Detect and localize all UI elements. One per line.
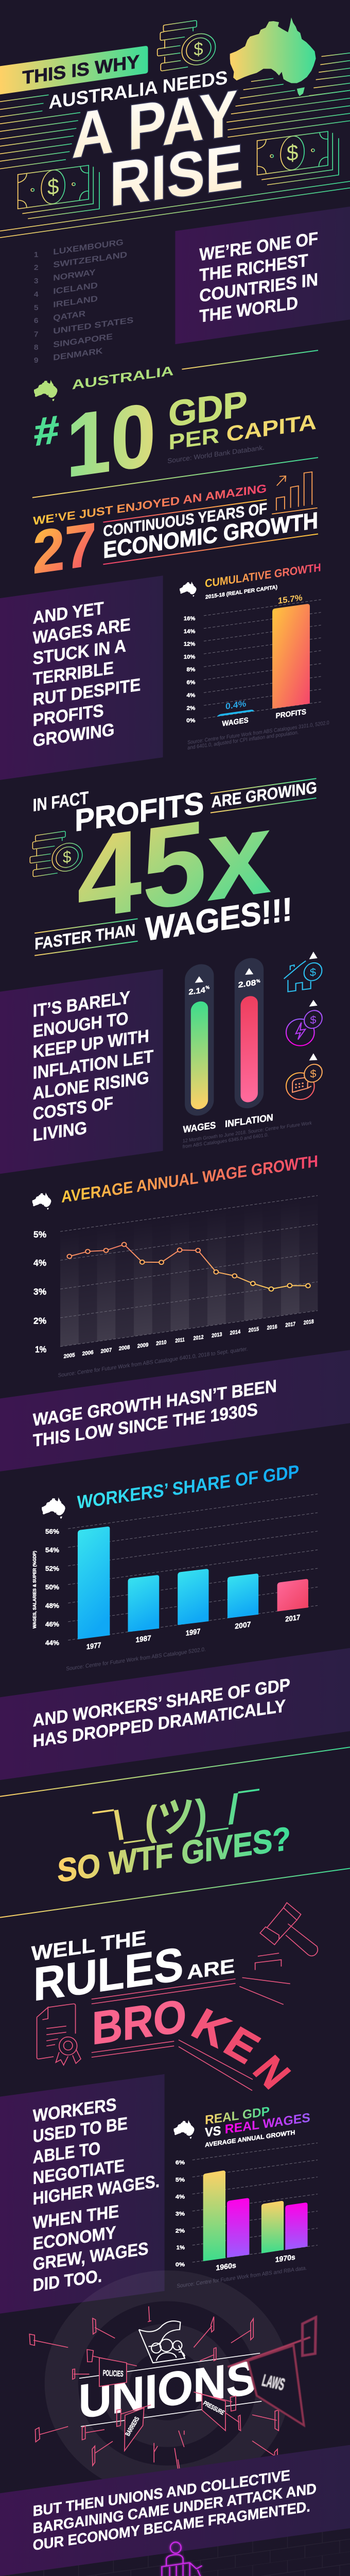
list: top countries by GDP per capita: NORWAY — [53, 267, 96, 283]
icon: hammer — [260, 1903, 318, 1956]
axis labels: percent: 16% — [184, 615, 196, 622]
panel: barely enough — [0, 969, 163, 1174]
panel: workers used to negotiate — [0, 2074, 165, 2314]
panel: workers used to negotiate: ABLE TO — [33, 2138, 100, 2167]
panel: workers used to negotiate: WORKERS — [33, 2094, 116, 2126]
panel: barely enough: LIVING — [33, 1117, 87, 1145]
axis labels: percent: 6% — [187, 680, 196, 686]
chart title: real GDP vs real wages — [205, 2104, 310, 2148]
axis labels: growth percent: 6% — [176, 2160, 185, 2166]
bar: 1977 — [78, 1527, 110, 1639]
sign: laws, flying — [227, 2317, 316, 2426]
panel: and yet wages are stuck — [0, 575, 163, 780]
list: top countries by GDP per capita: SINGAPORE — [53, 332, 113, 349]
bar labels: years: 2017 — [285, 1613, 300, 1624]
section: gig economy — [0, 2528, 350, 2576]
bar labels: wages and profits: WAGES — [222, 716, 249, 728]
icon: banknote left — [18, 165, 99, 219]
gauge: inflation — [235, 956, 264, 1110]
band: but then unions: BUT THEN UNIONS AND COLLECTIVE — [33, 2467, 290, 2520]
axis labels: years: 2014 — [230, 1329, 241, 1336]
band: wage growth hasn't been this low: WAGE GROWTH HASN’T BEEN — [33, 1376, 277, 1430]
panel: workers used to negotiate: NEGOTIATE — [33, 2155, 125, 2188]
icon: rising bar chart — [272, 472, 318, 514]
banner: this is why — [0, 46, 148, 94]
panel: richest countries: COUNTRIES IN — [199, 269, 318, 306]
list: top countries by GDP per capita: 3 — [34, 277, 39, 285]
bar: profits 15.7% — [272, 604, 310, 709]
axis labels: growth percent: 3% — [176, 2211, 185, 2217]
sign: pressure: PRESSURE — [202, 2400, 226, 2416]
axis labels: 5% to 1%: 4% — [33, 1258, 46, 1268]
label: Australia: AUSTRALIA — [72, 363, 173, 392]
rule above growth statement — [103, 500, 267, 522]
axis labels: growth percent: 1% — [177, 2245, 185, 2251]
panel text: and yet wages are stuck: PROFITS — [33, 700, 104, 730]
list: top countries by GDP per capita: 7 — [34, 330, 39, 339]
list: top countries by GDP per capita: 6 — [34, 317, 39, 325]
chart title: real GDP vs real wages: REAL WAGES — [225, 2110, 310, 2137]
source: GDP vs wages: Source: Centre for Future Work from ABS and RBA data. — [177, 2265, 307, 2290]
sign: pressure — [202, 2394, 226, 2431]
stripes: right of title — [226, 53, 350, 137]
heading: rules: RULES — [33, 1938, 183, 2011]
axis labels: years: 2012 — [194, 1334, 204, 1342]
panel text: and yet wages are stuck: WAGES ARE — [33, 614, 131, 648]
panel: barely enough: ALONE RISING — [33, 1067, 149, 1104]
heading: broken: E — [216, 2018, 268, 2073]
source: wage growth: Source: Centre for Future Work from ABS Catalogue 6401.0, 2018 to Sept. quarter. — [58, 1346, 248, 1379]
axis labels: percent of GDP: 46% — [45, 1620, 59, 1628]
heading: continuous years of: CONTINUOUS YEARS OF — [103, 499, 267, 540]
band: but then unions: BARGAINING CAME UNDER ATTACK AND — [33, 2481, 317, 2537]
bar: 2017 — [277, 1579, 308, 1612]
panel: richest countries: THE WORLD — [199, 292, 298, 326]
axis labels: percent of GDP: 44% — [45, 1639, 59, 1647]
banner: this is why: THIS IS WHY — [22, 51, 139, 88]
chart: share gridlines — [68, 1494, 318, 1640]
heading: are growing: ARE GROWING — [212, 778, 317, 811]
pink broken rules — [92, 1953, 290, 2091]
panel: workers used to negotiate: WHEN THE — [33, 2201, 119, 2233]
list: top countries by GDP per capita: 2 — [34, 264, 39, 272]
icon: electricity cost — [286, 1000, 322, 1046]
icon: house cost: $ — [310, 965, 316, 979]
axis labels: growth percent: 5% — [176, 2177, 185, 2183]
list: top countries by GDP per capita: LUXEMBOURG — [53, 238, 124, 257]
bar labels: years: 2007 — [235, 1620, 251, 1631]
heading: so wtf gives: SO WTF GIVES? — [57, 1820, 291, 1889]
axis labels: percent: 8% — [187, 666, 196, 673]
icon: banknote right: $ — [287, 140, 298, 166]
rules around unions — [79, 2353, 261, 2427]
list: top countries by GDP per capita: QATAR — [53, 309, 85, 323]
list: top countries by GDP per capita: SWITZERLAND — [53, 250, 127, 269]
axis labels: years: 2006 — [82, 1349, 94, 1357]
gauge: wages — [185, 962, 214, 1117]
bar: 1997 — [178, 1569, 208, 1625]
rule below growth statement — [103, 534, 318, 564]
axis labels: 5% to 1%: 2% — [33, 1315, 46, 1326]
divider line — [32, 457, 318, 498]
axis labels: years: 2008 — [119, 1345, 130, 1352]
source: inflation: 12 Month Growth to June 2018. Source: Centre for Future Work — [183, 1121, 312, 1144]
band: wage growth hasn't been this low — [0, 1350, 350, 1471]
axis labels: percent: 2% — [187, 705, 196, 711]
gauge labels: INFLATION — [225, 1113, 273, 1130]
source: inflation — [183, 1121, 312, 1150]
section: unions under attack — [0, 2265, 350, 2576]
axis labels: percent of GDP: 56% — [45, 1528, 59, 1535]
icon: banknote right — [257, 131, 339, 185]
list: top countries by GDP per capita: 1 — [34, 251, 39, 259]
list: top countries by GDP per capita — [34, 238, 133, 365]
panel: workers used to negotiate: GREW, WAGES — [33, 2238, 148, 2275]
icon: food cost — [286, 1053, 322, 1099]
panel text: and yet wages are stuck: RUT DESPITE — [33, 674, 141, 709]
heading: A PAY: A PAY — [72, 76, 238, 172]
list: top countries by GDP per capita: 4 — [34, 291, 39, 299]
list: top countries by GDP per capita: ICELAND — [53, 280, 98, 296]
panel text: and yet wages are stuck: STUCK IN A — [33, 635, 126, 668]
heading: we've just enjoyed an amazing: WE’VE JUST ENJOYED AN AMAZING — [33, 482, 267, 528]
icon: food cost: $ — [310, 1067, 317, 1080]
icon: small Australia map — [34, 380, 58, 401]
rules around are growing — [211, 778, 317, 813]
heading: unions: UNIONS — [79, 2350, 257, 2429]
chart title: real GDP vs real wages: AVERAGE ANNUAL GROWTH — [205, 2129, 295, 2148]
icon: coin stack: $ — [63, 848, 71, 867]
icon: coin stack — [30, 832, 82, 876]
bar: 2007 — [227, 1573, 258, 1618]
source: cumulative growth: and 6401.0, adjusted for CPI inflation and population. — [187, 730, 299, 751]
heading: wages: WAGES!!! — [145, 891, 292, 948]
axis labels: years: 2009 — [137, 1342, 148, 1349]
heading: broken: BRO — [92, 1990, 186, 2054]
axis labels: years: 2010 — [156, 1340, 167, 1347]
section: rules are broken — [0, 1903, 318, 2314]
axis labels: percent: 0% — [186, 717, 196, 724]
bar labels: years: 1997 — [186, 1627, 200, 1638]
chart title: real GDP vs real wages: REAL GDP — [205, 2104, 270, 2127]
panel: barely enough: COSTS OF — [33, 1093, 113, 1124]
icon: electricity cost: $ — [310, 1013, 317, 1026]
bar labels: years: 1987 — [136, 1634, 151, 1645]
heading: GDP: GDP — [168, 383, 248, 435]
marker triangle: housing — [309, 952, 318, 959]
icon: banknote left: $ — [47, 173, 59, 200]
attack pins — [29, 2307, 278, 2481]
heading: Australia needs: AUSTRALIA NEEDS — [49, 67, 227, 113]
bar label: 15.7%: 15.7% — [278, 592, 303, 606]
heading: faster than: FASTER THAN — [34, 921, 135, 954]
divider line top — [0, 1747, 350, 1797]
sign: policies: POLICIES — [102, 2368, 124, 2379]
axis title: WAGES, SALARIES & SUPER (%GDP) — [32, 1551, 37, 1629]
source: inflation: from ABS Catalogues 6345.0 and 6401.0. — [183, 1132, 269, 1150]
axis labels: percent of GDP — [45, 1528, 59, 1647]
chart: GDP vs wages gridlines — [192, 2143, 318, 2262]
chart title: real GDP vs real wages: VS — [205, 2123, 221, 2140]
icon: house cost — [284, 961, 322, 992]
gauge: wages: % — [205, 985, 210, 990]
axis labels: percent of GDP: 54% — [45, 1547, 59, 1554]
bar: 1987 — [128, 1575, 159, 1632]
panel text: and yet wages are stuck — [33, 598, 141, 751]
panel text: and yet wages are stuck: AND YET — [33, 598, 104, 628]
icon: neon person and bin — [161, 2542, 205, 2576]
bar: wages 1960s — [227, 2198, 249, 2258]
axis labels: years: 2013 — [212, 1332, 222, 1339]
panel: barely enough: INFLATION LET — [33, 1046, 153, 1083]
icon: union flag — [139, 2321, 185, 2363]
stripes: left of title — [0, 95, 80, 169]
chart: wage growth columns — [60, 1195, 318, 1347]
icon: coin stack — [157, 21, 215, 71]
heading: per capita: PER CAPITA — [168, 410, 317, 454]
panel: workers used to negotiate: HIGHER WAGES. — [33, 2171, 160, 2209]
icon: white Australia map — [32, 1193, 51, 1210]
bar labels: decades — [216, 2253, 295, 2273]
heading: broken: K — [184, 1999, 238, 2057]
gauge: inflation: % — [256, 978, 260, 984]
heading: broken: N — [244, 2047, 300, 2097]
band: wage growth hasn't been this low: THIS LOW SINCE THE 1930S — [33, 1399, 258, 1451]
axis labels: percent of GDP: 50% — [45, 1584, 59, 1591]
axis labels: percent of GDP: 48% — [45, 1602, 59, 1609]
icon: white Australia map — [42, 1497, 65, 1519]
axis labels: years: 2011 — [175, 1337, 185, 1344]
sign: barriers — [124, 2408, 144, 2451]
axis labels: 5% to 1%: 3% — [33, 1286, 46, 1297]
divider line bottom — [0, 1868, 350, 1918]
list: top countries by GDP per capita: DENMARK — [53, 346, 102, 362]
panel: workers used to negotiate: ECONOMY — [33, 2222, 116, 2254]
axis labels: percent — [184, 615, 196, 724]
icon: certificate document — [37, 2004, 81, 2065]
section: workers' share — [0, 1319, 350, 1647]
source: workers' share: Source: Centre for Future Work from ABS Catalogue 5202.0. — [66, 1647, 206, 1672]
stat: number 10: 10 — [66, 384, 155, 496]
bar: wages 1970s — [285, 2202, 308, 2250]
axis labels: 5% to 1%: 1% — [35, 1344, 46, 1354]
bar labels: decades: 1970s — [275, 2253, 295, 2264]
target rings — [61, 2286, 273, 2481]
axis labels: percent: 14% — [184, 628, 196, 635]
panel text: and yet wages are stuck: GROWING — [33, 719, 114, 751]
axis labels: growth percent: 0% — [176, 2261, 185, 2268]
brick wall background — [0, 2528, 350, 2576]
axis labels: percent: 12% — [184, 641, 196, 647]
gauge labels: WAGES — [183, 1120, 216, 1135]
panel: barely enough: ENOUGH TO — [33, 1008, 128, 1041]
source: world bank: Source: World Bank Databank. — [167, 443, 265, 465]
section: GDP rank and growth — [0, 350, 321, 780]
sign: policies — [99, 2358, 127, 2386]
bar labels: decades: 1960s — [216, 2261, 236, 2273]
bar labels: wages and profits: 0.4% — [225, 699, 247, 711]
panel: richest countries: WE’RE ONE OF — [199, 228, 318, 265]
axis labels: years: 2017 — [285, 1321, 295, 1329]
bar: GDP 1970s — [261, 2201, 284, 2253]
list: top countries by GDP per capita: 8 — [34, 343, 39, 352]
heading: in fact: IN FACT — [33, 787, 89, 815]
panel: richest countries — [175, 207, 350, 344]
heading: are: ARE — [187, 1955, 235, 1984]
bar labels: wages and profits — [222, 699, 306, 728]
bar labels: years — [86, 1613, 300, 1651]
axis labels: growth percent: 2% — [176, 2228, 185, 2234]
lines under title — [0, 181, 350, 238]
gauge labels — [183, 1113, 273, 1135]
icon: white Australia map — [180, 582, 197, 597]
bar: wages 0.4% — [217, 710, 254, 717]
chart title: cumulative growth: CUMULATIVE GROWTH — [205, 561, 321, 590]
bar: GDP 1960s — [203, 2171, 225, 2261]
section: title header — [0, 18, 350, 365]
line above Australia label — [182, 350, 318, 369]
band: workers' share dropped — [0, 1648, 350, 1780]
band: but then unions — [0, 2445, 350, 2576]
heading: broken — [92, 1990, 300, 2097]
chart: wage growth line series — [67, 1243, 310, 1291]
heading: RISE: RISE — [109, 131, 243, 220]
shrug kaomoji: ¯\_(ツ)_/¯ — [93, 1783, 259, 1852]
axis labels: years: 2016 — [267, 1324, 277, 1331]
rules around faster than — [34, 919, 138, 956]
icon: coin stack: $ — [194, 38, 203, 60]
bar labels: wages and profits: PROFITS — [276, 708, 306, 720]
section: inflation and wage growth — [0, 956, 322, 1354]
chart subtitle: 2015-18 (REAL PER CAPITA) — [205, 584, 277, 600]
sign: barriers: BARRIERS — [124, 2416, 141, 2437]
axis labels: percent of GDP: 52% — [45, 1565, 59, 1572]
panel: workers used to negotiate: DID TOO. — [33, 2265, 102, 2295]
axis labels: percent: 10% — [184, 654, 196, 660]
icon: map of Australia — [230, 18, 316, 96]
panel: richest countries: THE RICHEST — [199, 250, 308, 285]
heading: profits: PROFITS — [75, 786, 204, 838]
list: top countries by GDP per capita: 5 — [34, 303, 39, 312]
section: so wtf gives — [0, 1613, 350, 1918]
axis labels: years: 2015 — [249, 1326, 259, 1334]
section: profits 45x — [30, 598, 329, 959]
gauge: wages: 2.14 — [188, 986, 205, 997]
sign: laws, flying: LAWS — [260, 2371, 287, 2394]
stat: number 27: 27 — [33, 510, 96, 587]
axis labels: years: 2007 — [101, 1347, 112, 1354]
list: top countries by GDP per capita: UNITED STATES — [53, 315, 133, 336]
stat: hash sign: # — [34, 407, 59, 454]
list: top countries by GDP per capita: 9 — [34, 356, 39, 365]
axis labels: percent: 4% — [187, 692, 196, 699]
panel: barely enough: KEEP UP WITH — [33, 1025, 149, 1062]
chart title: workers' share of GDP: WORKERS’ SHARE OF GDP — [77, 1461, 299, 1513]
axis labels: growth percent — [176, 2160, 185, 2268]
chart: cumulative growth gridlines — [204, 600, 321, 718]
panel: workers used to negotiate: USED TO BE — [33, 2113, 128, 2146]
gauge: inflation: 2.08 — [238, 979, 256, 990]
band: but then unions: OUR ECONOMY BECAME FRAGMENTED. — [33, 2499, 310, 2554]
axis labels: years: 2018 — [304, 1319, 314, 1326]
axis labels: 5% to 1% — [33, 1229, 46, 1354]
bar labels: years: 1977 — [86, 1641, 101, 1651]
stat: 45x: 45x — [77, 786, 272, 944]
axis labels: years: 2005 — [64, 1352, 75, 1360]
list: top countries by GDP per capita: IRELAND — [53, 294, 98, 310]
axis labels: growth percent: 4% — [176, 2194, 185, 2200]
panel text: and yet wages are stuck: TERRIBLE — [33, 657, 114, 689]
band: workers' share dropped: AND WORKERS’ SHARE OF GDP — [33, 1674, 290, 1731]
icon: white Australia map — [173, 2120, 195, 2139]
chart: wage growth gridlines — [60, 1196, 318, 1347]
panel: barely enough: IT’S BARELY — [33, 987, 130, 1021]
heading: well the: WELL THE — [31, 1926, 146, 1965]
axis labels: years — [64, 1319, 314, 1360]
axis labels: 5% to 1%: 5% — [33, 1229, 46, 1240]
band: workers' share dropped: HAS DROPPED DRAMATICALLY — [33, 1696, 286, 1751]
